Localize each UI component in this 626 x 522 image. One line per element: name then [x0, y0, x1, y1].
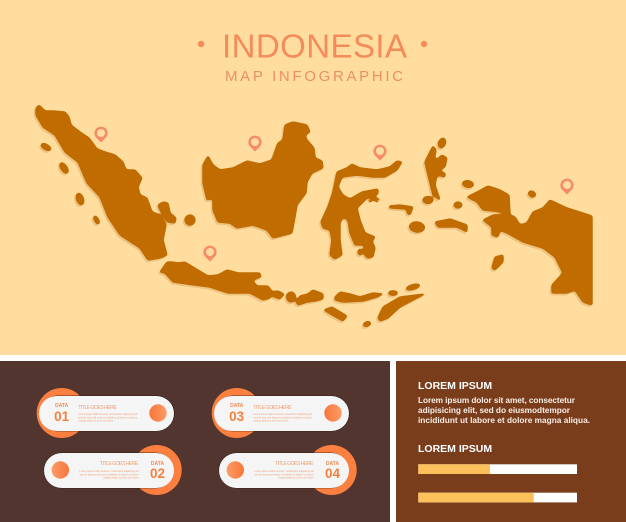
paragraph: adipisicing elit, sed do eiusmodtempor	[418, 405, 571, 415]
card 02: DATA	[151, 461, 164, 467]
card 03: 03	[229, 409, 245, 424]
card 01: Lorem ipsum dolor sit amet, consectetur adipiscing elit	[78, 412, 138, 416]
paragraph: incididunt ut labore et dolore magna aliqua.	[418, 415, 590, 425]
card 02: Lorem ipsum dolor sit amet, consectetur adipiscing elit	[80, 469, 139, 473]
card 03: TITLE GOES HERE	[253, 405, 292, 411]
card 03: sed do eiusmod tempor incididunt ut labore et dolore	[253, 415, 313, 419]
card 04: DATA	[326, 461, 339, 467]
card 04	[219, 445, 357, 495]
card 03: DATA	[230, 403, 244, 409]
subtitle: MAP INFOGRAPHIC	[225, 68, 403, 85]
card 01: sed do eiusmod tempor incididunt ut labore et dolore	[78, 415, 138, 419]
card 02	[44, 445, 182, 495]
card 04: TITLE GOES HERE	[275, 461, 314, 467]
card 01: TITLE GOES HERE	[78, 405, 117, 411]
paragraph: Lorem ipsum dolor sit amet, consectetur	[418, 395, 576, 405]
card 01: 01	[54, 409, 70, 424]
card 03: magna aliqua ut enim ad minim	[253, 419, 288, 423]
paragraph	[418, 395, 590, 425]
progress bar 1	[418, 464, 577, 474]
card 02: magna aliqua ut enim ad minim	[104, 476, 138, 480]
card 04: Lorem ipsum dolor sit amet, consectetur adipiscing elit	[254, 469, 314, 473]
heading: LOREM IPSUM	[418, 443, 492, 455]
map of Indonesia	[34, 105, 592, 329]
map panel background	[0, 0, 626, 355]
card 01: magna aliqua ut enim ad minim	[78, 419, 113, 423]
card 02: TITLE GOES HERE	[100, 461, 139, 467]
panel: data cards	[0, 361, 390, 522]
title: INDONESIA	[222, 28, 407, 64]
card 03	[212, 388, 350, 438]
card 03: Lorem ipsum dolor sit amet, consectetur adipiscing elit	[253, 412, 313, 416]
card 01	[37, 388, 175, 438]
card 04: magna aliqua ut enim ad minim	[278, 476, 314, 480]
heading: LOREM IPSUM	[418, 380, 492, 392]
progress bar 2	[418, 493, 577, 502]
panel: lorem ipsum	[396, 361, 626, 522]
location pins	[94, 127, 574, 262]
card 04: 04	[325, 466, 340, 481]
card 01: DATA	[55, 403, 69, 409]
card 02: sed do eiusmod tempor incididunt ut labore et dolore	[80, 472, 139, 476]
card 02: 02	[150, 466, 165, 481]
card 04: sed do eiusmod tempor incididunt ut labore et dolore	[254, 472, 314, 476]
